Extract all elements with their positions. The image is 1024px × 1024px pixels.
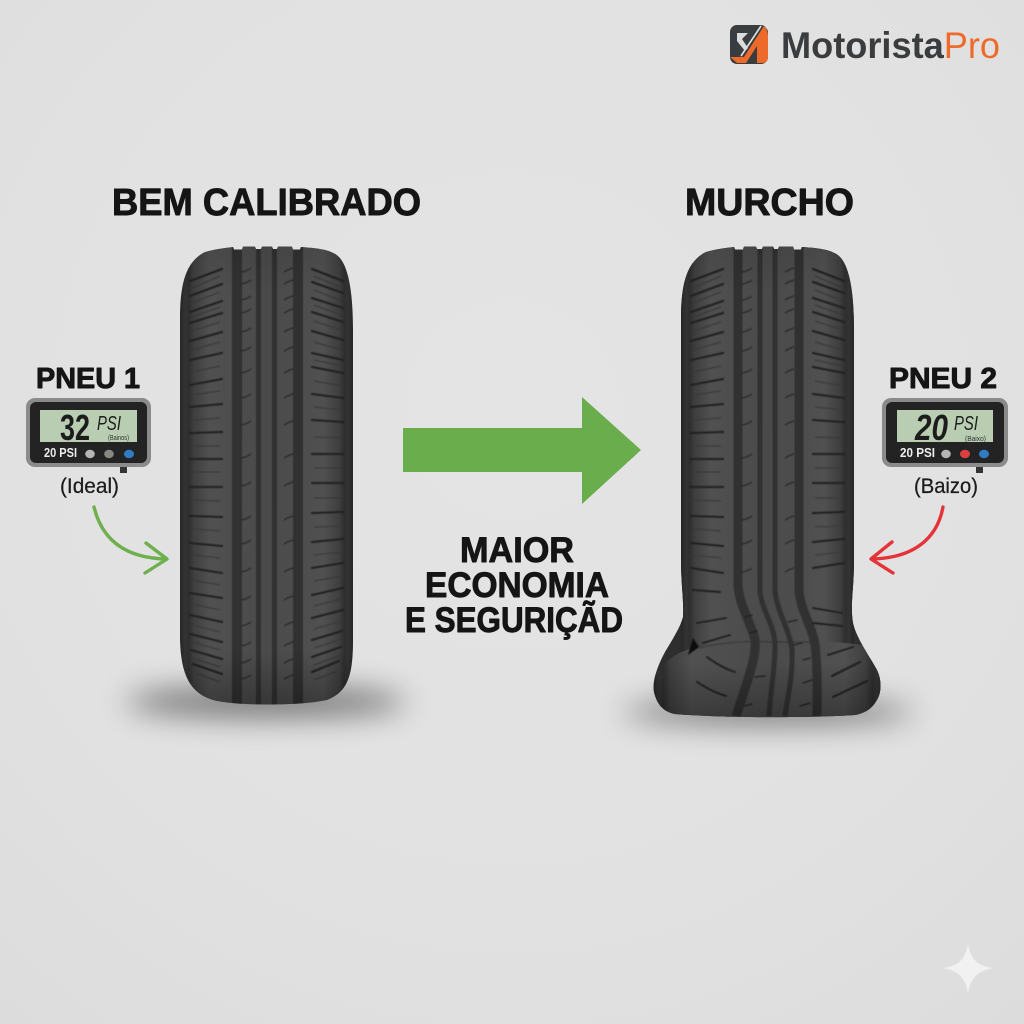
gauge 1: 32 PSI: 32 (60, 407, 90, 448)
logo: MotoristaPro (730, 24, 1000, 66)
gauge 1: 32 PSI: 20 PSI (44, 445, 77, 460)
bulge base (652, 641, 884, 720)
text: maior economia e segurição (405, 531, 623, 640)
caption: ideal: (Ideal) (60, 475, 119, 498)
lower tread sipes (190, 576, 343, 682)
gauge 2: 20 PSI (882, 398, 1008, 473)
gauge 1: 32 PSI: PSI (97, 413, 121, 435)
bulge fold (699, 642, 812, 648)
text: maior economia e segurição: MAIOR (460, 531, 574, 570)
logo wordmark: MotoristaPro (781, 25, 1000, 66)
gauge 2: 20 PSI: PSI (954, 413, 978, 435)
fold hole (688, 638, 699, 655)
upper tread sipes (190, 268, 343, 573)
text: maior economia e segurição: E SEGURIÇÃD (405, 601, 623, 640)
gauge 2: 20 PSI: 20 PSI (900, 445, 935, 460)
icon: logo mark (730, 24, 769, 64)
tire shadow right (623, 700, 913, 724)
tread grooves (232, 245, 303, 707)
tire 1: well inflated (180, 245, 353, 707)
gauge 1: 32 PSI: (Bainos) (108, 435, 129, 442)
bulge sipes (693, 590, 867, 706)
arrow: big green (403, 397, 641, 504)
arrow: green curved (94, 507, 167, 573)
arrow: red curved (871, 507, 943, 573)
heading: bem calibrado: BEM CALIBRADO (112, 182, 421, 224)
gauge 1: 32 PSI (26, 398, 151, 473)
gauge 2: 20 PSI: 20 (914, 407, 948, 448)
text: maior economia e segurição: ECONOMIA (425, 566, 609, 605)
label: pneu 1: PNEU 1 (36, 363, 140, 395)
label: pneu 2: PNEU 2 (889, 363, 997, 395)
heading: murcho: MURCHO (685, 182, 854, 224)
tread grooves (736, 245, 817, 716)
tire 2: flat (650, 245, 885, 720)
upper tread sipes (691, 268, 844, 573)
caption: baixo: (Baizo) (914, 475, 978, 498)
icon: sparkle (943, 944, 993, 993)
gauge 2: 20 PSI: (Baixo) (965, 436, 986, 443)
tire shadow left (126, 687, 406, 717)
